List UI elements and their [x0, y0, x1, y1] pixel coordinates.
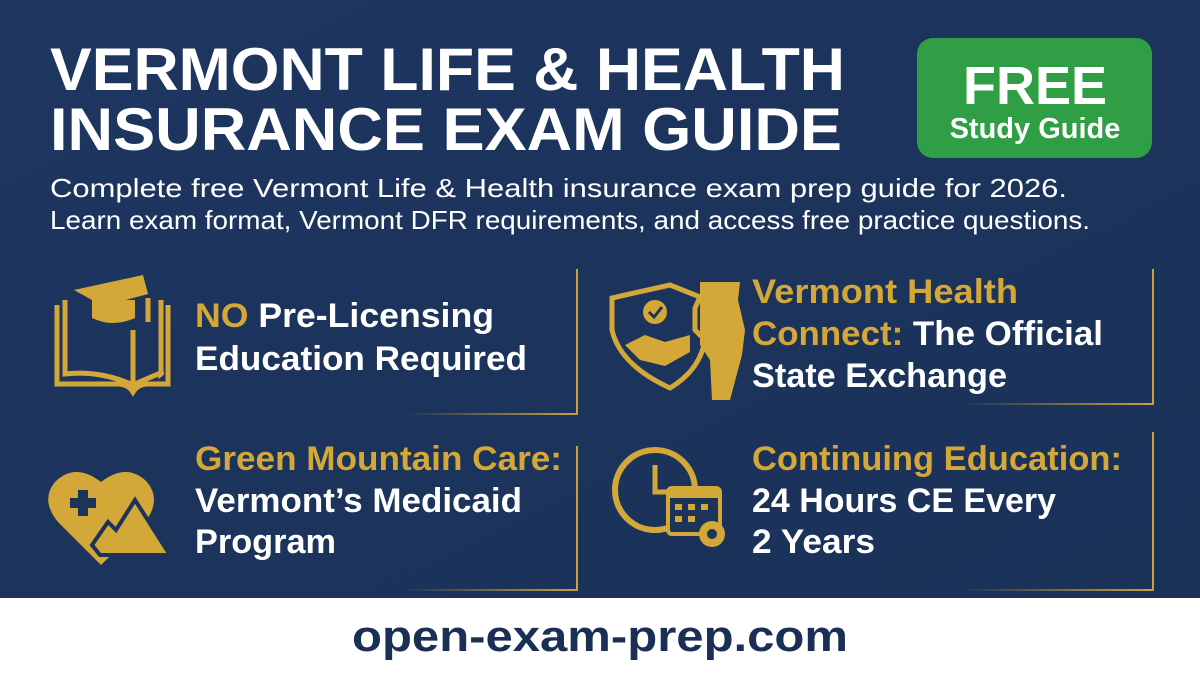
panel: continuing education: 2 Years	[752, 523, 875, 561]
badge: free study guide	[917, 38, 1152, 158]
panel: vermont health connect: State Exchange	[752, 357, 1007, 395]
panel: vermont health connect: Connect: The Official	[752, 315, 1103, 353]
panel: green mountain care: Green Mountain Care:	[195, 440, 562, 478]
panel: no pre-licensing: Education Required	[195, 340, 527, 378]
panel: green mountain care: Vermont’s Medicaid	[195, 482, 522, 520]
title: INSURANCE EXAM GUIDE	[50, 96, 842, 163]
icon: heart with cross and mountain	[48, 472, 170, 565]
subtitle: Complete free Vermont Life & Health insurance exam prep guide for 2026.	[50, 173, 1067, 203]
subtitle: Learn exam format, Vermont DFR requirements, and access free practice questions.	[50, 205, 1090, 235]
icon: shield handshake and vermont map	[612, 282, 745, 400]
panel: continuing education	[615, 432, 1154, 591]
icon: book with graduation cap	[57, 275, 168, 392]
panel: vermont health connect	[612, 269, 1154, 405]
panel: no pre-licensing: NO Pre-Licensing	[195, 297, 494, 335]
title	[50, 36, 845, 163]
panel: green mountain care: Program	[195, 523, 336, 561]
panel: green mountain care	[48, 440, 578, 591]
panel: vermont health connect: Vermont Health	[752, 273, 1018, 311]
footer	[0, 598, 1200, 675]
footer: open-exam-prep.com	[352, 612, 848, 661]
panel: no pre-licensing	[57, 269, 578, 415]
panel: continuing education: 24 Hours CE Every	[752, 482, 1056, 520]
subtitle	[50, 173, 1090, 235]
badge: free study guide: Study Guide	[950, 113, 1120, 145]
icon: clock calendar gear	[615, 450, 725, 547]
badge: free study guide: FREE	[963, 56, 1107, 116]
panel: continuing education: Continuing Education:	[752, 440, 1122, 478]
title: VERMONT LIFE & HEALTH	[50, 36, 845, 103]
